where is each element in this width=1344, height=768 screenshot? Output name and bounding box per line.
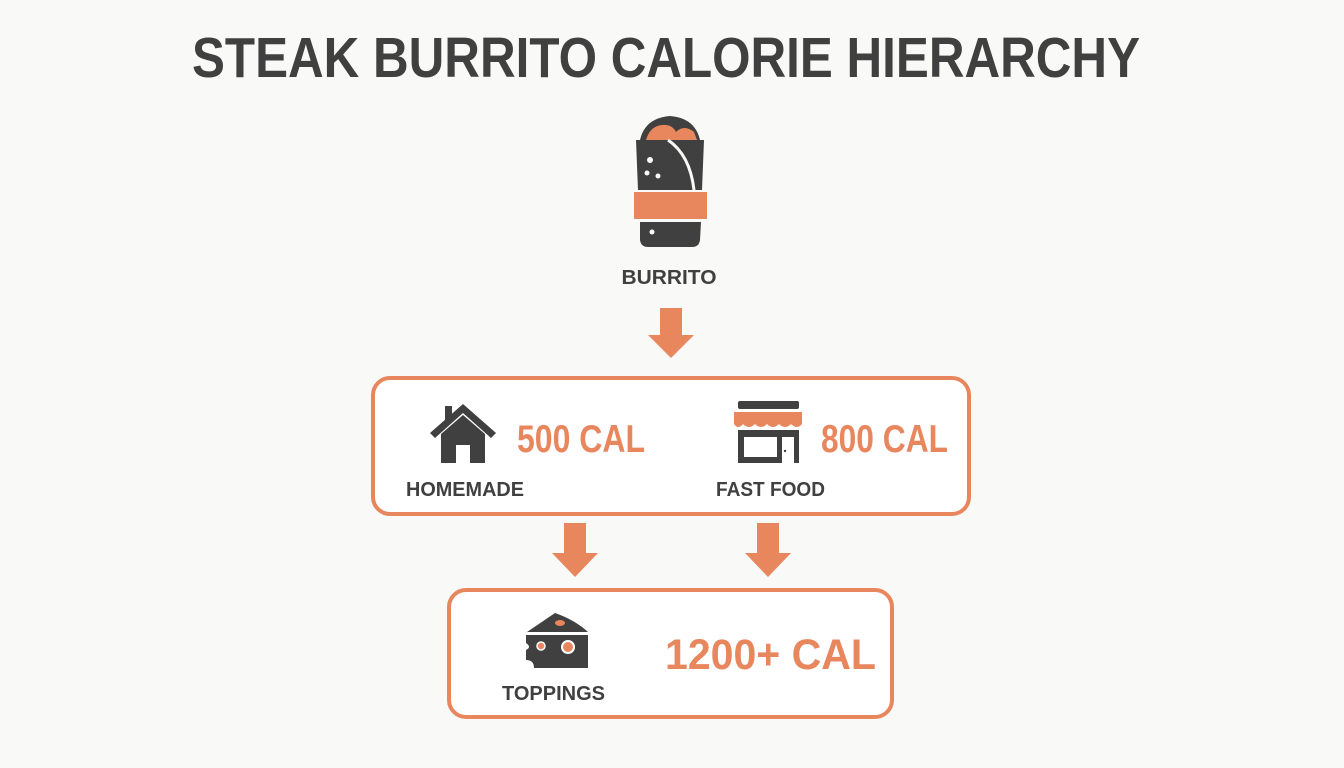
arrow: right xyxy=(745,523,791,577)
title: STEAK BURRITO CALORIE HIERARCHY xyxy=(192,26,1140,90)
icon: burrito xyxy=(634,116,707,247)
icon: house xyxy=(430,404,496,463)
value: 1200+ cal: 1200+ CAL xyxy=(665,631,876,679)
value: 800 cal: 800 CAL xyxy=(821,418,948,461)
value: 500 cal: 500 CAL xyxy=(517,418,645,461)
arrow: left xyxy=(552,523,598,577)
label: burrito: BURRITO xyxy=(622,267,716,289)
label: fast food: FAST FOOD xyxy=(716,479,825,501)
arrow 1 xyxy=(648,308,694,358)
icon: cheese xyxy=(526,613,588,668)
label: homemade: HOMEMADE xyxy=(406,479,524,501)
icon: store xyxy=(734,401,802,463)
label: toppings: TOPPINGS xyxy=(502,683,605,705)
panel: toppings xyxy=(449,590,892,717)
panel: homemade vs fast food xyxy=(373,378,969,514)
